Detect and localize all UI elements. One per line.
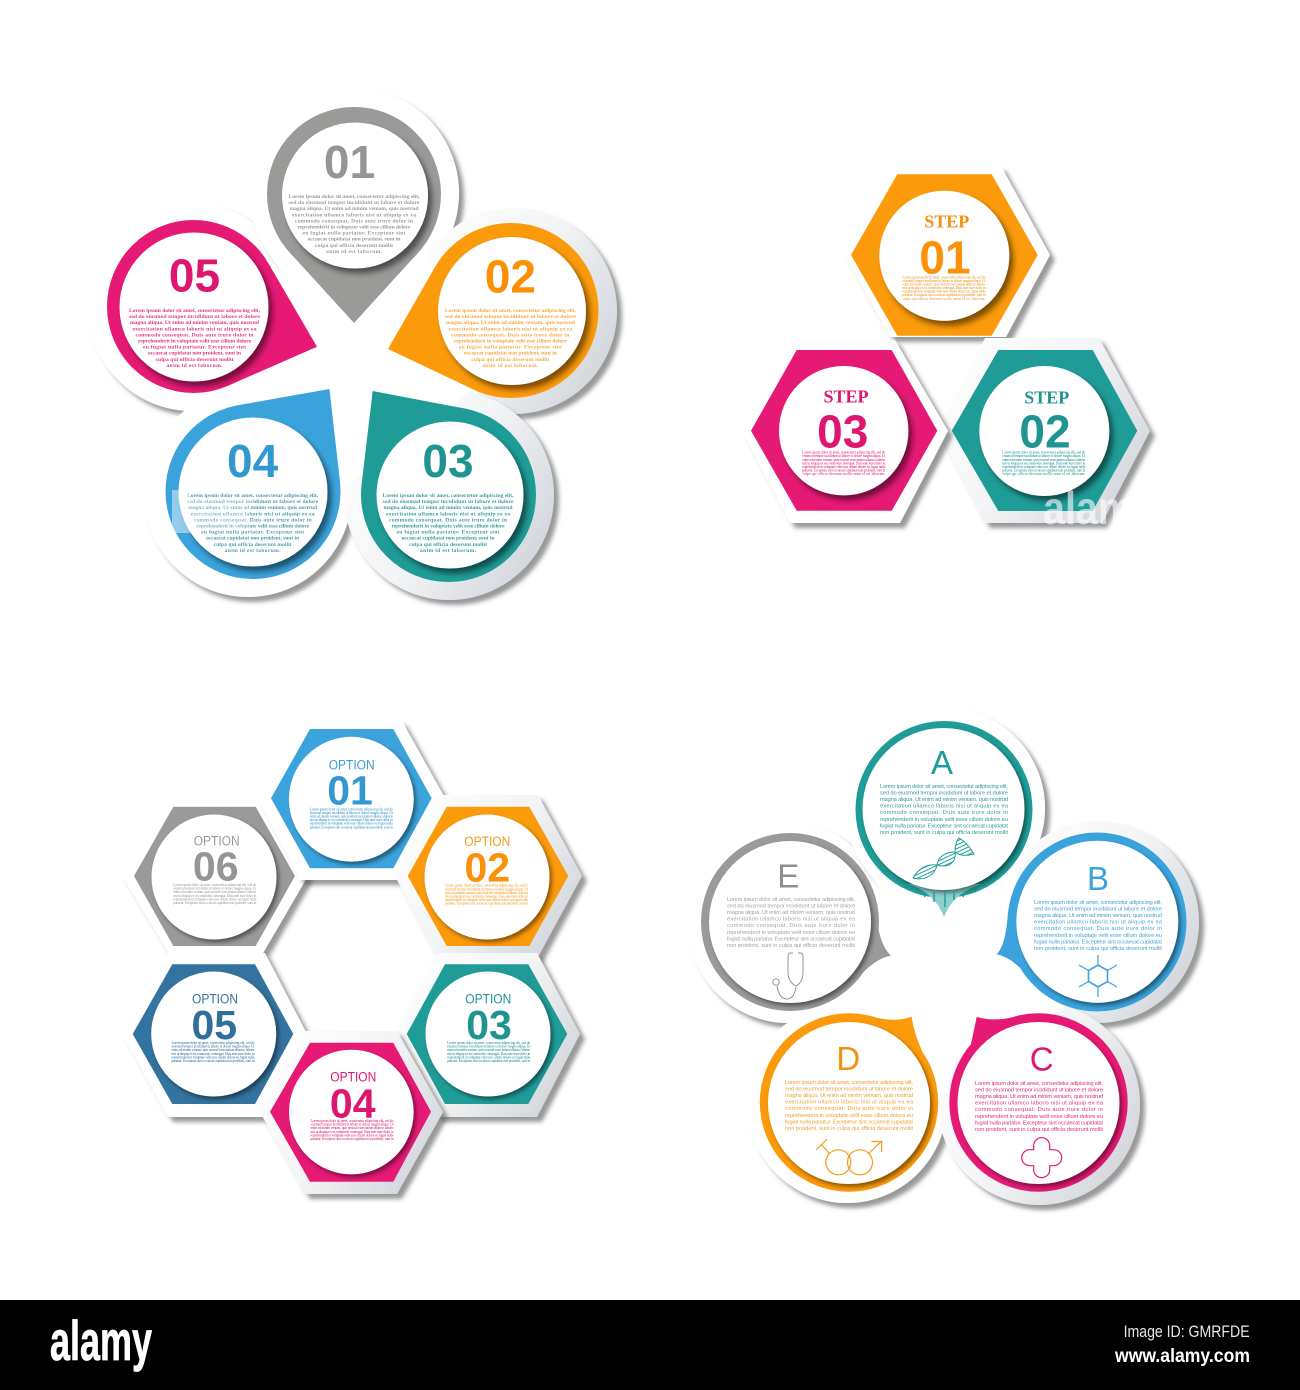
circle C pink: magna aliqua. Ut enim ad minim veniam, quis nostrud — [975, 1094, 1103, 1100]
petal 03 teal: commodo consequat. Duis aute irure dolor in — [389, 517, 508, 523]
hexagon step 03 pink: reprehenderit in voluptate velit esse cillum dolore eu fugiat nulla — [802, 465, 886, 469]
hexagon option 05 dark blue — [133, 964, 293, 1104]
petal 02 orange: 02 — [485, 251, 536, 303]
sticker 01 — [249, 88, 459, 368]
petal 05 pink: culpa qui officia deserunt mollit — [156, 357, 234, 363]
hexagon step 03 pink: pariatur. Excepteur sint occaecat cupidatat non proident, sunt in — [802, 468, 886, 473]
icon: DNA helix — [913, 838, 974, 879]
hexagon option 06 grey: OPTION — [194, 833, 240, 848]
petal 02 orange: Lorem ipsum dolor sit amet, consectetur adipiscing elit, — [445, 308, 576, 314]
petal 02 orange: exercitation ullamco laboris nisi ut aliquip ex ea — [448, 326, 573, 332]
sticker 03 — [344, 368, 554, 600]
circle E grey: Lorem ipsum dolor sit amet, consectetur adipiscing elit, — [727, 897, 855, 903]
petal 02 orange — [388, 223, 598, 398]
hexagon option 01 blue: enim ad minim veniam, quis nostrud exercitation ullamco laboris — [310, 814, 393, 820]
circle B blue: magna aliqua. Ut enim ad minim veniam, quis nostrud — [1034, 913, 1162, 919]
circle D orange: non proident, sunt in culpa qui officia deserunt mollit — [785, 1126, 913, 1132]
circle B blue: commodo consequat. Duis aute irure dolor in — [1034, 926, 1162, 932]
petal 04 blue: sed do eiusmod tempor incididunt ut labore et dolore — [187, 499, 319, 505]
circle B blue: reprehenderit in voluptate velit esse cillum dolore eu — [1034, 933, 1162, 939]
circle B blue: sed do eiusmod tempor incididunt ut labore et dolore — [1034, 907, 1162, 913]
circle A teal: non proident, sunt in culpa qui officia deserunt mollit — [880, 830, 1008, 836]
hexagon option 05 dark blue: pariatur. Excepteur sint occaecat cupidatat non proident, sunt in — [172, 1059, 255, 1064]
petal 05 pink: magna aliqua. Ut enim ad minim veniam, quis nostrud — [130, 320, 260, 326]
petal 02 orange: reprehenderit in voluptate velit esse cillum dolore — [454, 338, 567, 344]
petal 02 orange: occaecat cupidatat non proident, sunt in — [464, 351, 558, 357]
circle D orange: D — [836, 1040, 860, 1077]
hexagon option 03 teal: nisi ut aliquip ex ea commodo consequat. Duis aute irure dolor in — [447, 1052, 530, 1056]
sticker B — [945, 821, 1199, 1023]
hexagon option 01 blue: nisi ut aliquip ex ea commodo consequat. Duis aute irure dolor in — [310, 818, 393, 822]
hexagon step 02 teal: 02 — [1019, 405, 1071, 457]
petal 04 blue: magna aliqua. Ut enim ad minim veniam, quis nostrud — [188, 505, 318, 511]
hexagon step 02 teal: reprehenderit in voluptate velit esse cillum dolore eu fugiat nulla — [1002, 465, 1086, 469]
petal 03 teal: 03 — [422, 435, 474, 487]
hexagon option 03 teal — [407, 964, 567, 1104]
petal 01 grey: magna aliqua. Ut enim ad minim veniam, quis nostrud — [290, 206, 419, 212]
hexagon option 05 dark blue: nisi ut aliquip ex ea commodo consequat. Duis aute irure dolor in — [172, 1052, 255, 1056]
hexagon option 06 grey — [134, 807, 295, 946]
circle B blue: exercitation ullamco laboris nisi ut aliquip ex ea — [1034, 920, 1163, 926]
circle B blue: B — [1087, 860, 1109, 897]
sticker step 03 — [742, 340, 948, 523]
hexagon step 03 pink: 03 — [817, 405, 868, 457]
icon: medical cross — [1022, 1138, 1062, 1178]
hexagon option 06 grey: eiusmod tempor incididunt ut labore et dolore magna aliqua. Ut — [173, 887, 256, 891]
hexagon option 04 pink: enim ad minim veniam, quis nostrud exercitation ullamco laboris — [310, 1126, 394, 1131]
petal 04 blue: 04 — [227, 435, 279, 487]
circle E grey: non proident, sunt in culpa qui officia deserunt mollit — [727, 943, 855, 949]
hexagon step 02 teal — [952, 350, 1137, 511]
panel: six option hexagons — [122, 721, 582, 1194]
petal 03 teal: Lorem ipsum dolor sit amet, consectetur adipiscing elit, — [382, 493, 514, 499]
circle E grey: fugiat nulla pariatur. Excepteur sint occaecat cupidatat — [727, 936, 855, 942]
hexagon option 03 teal: Lorem ipsum dolor sit amet, consectetur adipiscing elit, sed do — [447, 1041, 530, 1046]
circle D orange: magna aliqua. Ut enim ad minim veniam, quis nostrud — [785, 1093, 913, 1099]
petal 01 grey: Lorem ipsum dolor sit amet, consectetur adipiscing elit, — [288, 194, 420, 200]
hexagon step 02 teal: Lorem ipsum dolor sit amet, consectetur adipiscing elit, sed do — [1002, 451, 1086, 456]
sticker C — [938, 975, 1140, 1205]
sticker 05 — [88, 203, 352, 411]
petal 04 blue: Lorem ipsum dolor sit amet, consectetur adipiscing elit, — [187, 493, 319, 499]
circle C pink — [949, 1013, 1128, 1192]
hexagon step 03 pink: Lorem ipsum dolor sit amet, consectetur adipiscing elit, sed do — [802, 451, 886, 456]
petal 05 pink: commodo consequat. Duis aute irure dolor in — [136, 332, 254, 338]
panel: five lettered speech circles — [688, 708, 1199, 1205]
circle A teal — [856, 721, 1032, 917]
petal 04 blue: occaecat cupidatat non proident, sunt in — [206, 536, 300, 542]
petal 01 grey — [267, 107, 441, 323]
circle E grey: E — [777, 858, 799, 895]
circle A teal: sed do eiusmod tempor incididunt ut labore et dolore — [880, 791, 1008, 797]
petal 03 teal: occaecat cupidatat non proident, sunt in — [402, 536, 495, 542]
hexagon step 01 orange — [851, 174, 1038, 336]
footer logo: alamy — [50, 1309, 152, 1372]
hexagon option 02 orange: enim ad minim veniam, quis nostrud exercitation ullamco laboris — [445, 891, 529, 896]
circle C pink: exercitation ullamco laboris nisi ut aliquip ex ea — [975, 1101, 1104, 1107]
hexagon option 05 dark blue: Lorem ipsum dolor sit amet, consectetur adipiscing elit, sed do — [172, 1041, 255, 1046]
sticker 04 — [144, 368, 352, 597]
hexagon step 03 pink: STEP — [824, 386, 868, 406]
sticker option 06 — [122, 797, 308, 955]
sticker option 04 — [260, 1031, 443, 1194]
petal 04 blue: commodo consequat. Duis aute irure dolor in — [194, 517, 312, 523]
hexagon option 05 dark blue: 05 — [191, 1002, 237, 1048]
hexagon step 02 teal: nisi ut aliquip ex ea commodo consequat. Duis aute irure dolor in — [1002, 461, 1086, 465]
hexagon step 01 orange: reprehenderit in voluptate velit esse cillum dolore eu fugiat nulla — [902, 290, 986, 294]
website: www.alamy.com — [1114, 1346, 1250, 1367]
circle B blue: non proident, sunt in culpa qui officia deserunt mollit — [1034, 946, 1162, 952]
circle D orange: Lorem ipsum dolor sit amet, consectetur adipiscing elit, — [785, 1080, 913, 1086]
circle D orange — [760, 1013, 938, 1192]
circle D orange: exercitation ullamco laboris nisi ut aliquip ex ea — [785, 1100, 914, 1106]
petal 04 blue: reprehenderit in voluptate velit esse cillum dolore — [196, 524, 310, 530]
circle E grey: reprehenderit in voluptate velit esse cillum dolore eu — [727, 930, 855, 936]
watermark fragment: alam — [1043, 482, 1133, 534]
hexagon option 02 orange: eiusmod tempor incididunt ut labore et dolore magna aliqua. Ut — [445, 887, 528, 891]
circle E grey: sed do eiusmod tempor incididunt ut labore et dolore — [727, 904, 855, 910]
hexagon option 06 grey: pariatur. Excepteur sint occaecat cupidatat non proident, sunt in — [173, 901, 257, 906]
petal 01 grey: culpa qui officia deserunt mollit — [315, 243, 393, 249]
circle A teal: fugiat nulla pariatur. Excepteur sint occaecat cupidatat — [880, 823, 1008, 829]
petal 04 blue: eu fugiat nulla pariatur. Excepteur sint — [201, 530, 304, 536]
hexagon step 03 pink — [751, 350, 937, 511]
petal 02 orange: magna aliqua. Ut enim ad minim veniam, quis nostrud — [446, 320, 576, 326]
circle A teal: exercitation ullamco laboris nisi ut aliquip ex ea — [880, 804, 1009, 810]
circle E grey: commodo consequat. Duis aute irure dolor in — [727, 923, 855, 929]
petal 01 grey: anim id est laborum. — [326, 249, 383, 255]
petal 01 grey: eu fugiat nulla pariatur. Excepteur sint — [302, 231, 406, 237]
circle B blue: fugiat nulla pariatur. Excepteur sint occaecat cupidatat — [1034, 939, 1162, 945]
hexagon option 04 pink: reprehenderit in voluptate velit esse cillum dolore eu fugiat nulla — [310, 1133, 394, 1137]
hexagon option 01 blue: pariatur. Excepteur sint occaecat cupidatat non proident, sunt in — [310, 825, 393, 830]
circle D orange: commodo consequat. Duis aute irure dolor in — [785, 1106, 913, 1112]
hexagon option 02 orange: Lorem ipsum dolor sit amet, consectetur adipiscing elit, sed do — [445, 884, 528, 889]
hexagon step 02 teal: culpa qui officia deserunt mollit anim id est laborum. — [1002, 472, 1085, 476]
sticker option 05 — [122, 953, 307, 1117]
petal 01 grey: reprehenderit in voluptate velit esse cillum dolore — [298, 224, 411, 230]
circle A teal: reprehenderit in voluptate velit esse cillum dolore eu — [880, 817, 1008, 823]
hexagon option 06 grey: nisi ut aliquip ex ea commodo consequat. Duis aute irure dolor in — [173, 894, 257, 898]
circle B blue: Lorem ipsum dolor sit amet, consectetur adipiscing elit, — [1034, 900, 1162, 906]
sticker option 01 — [258, 721, 445, 880]
petal 03 teal — [361, 391, 536, 582]
hexagon step 01 orange: culpa qui officia deserunt mollit anim id est laborum. — [902, 297, 986, 301]
sticker option 03 — [395, 953, 580, 1117]
petal 05 pink: reprehenderit in voluptate velit esse cillum dolore — [138, 338, 252, 344]
hexagon step 02 teal: pariatur. Excepteur sint occaecat cupidatat non proident, sunt in — [1002, 468, 1086, 473]
circle C pink: fugiat nulla pariatur. Excepteur sint occaecat cupidatat — [975, 1120, 1103, 1126]
hexagon option 04 pink: Lorem ipsum dolor sit amet, consectetur adipiscing elit, sed do — [310, 1119, 394, 1124]
panel: five numbered teardrops — [88, 88, 617, 600]
circle D orange: fugiat nulla pariatur. Excepteur sint occaecat cupidatat — [785, 1119, 913, 1125]
hexagon option 05 dark blue: enim ad minim veniam, quis nostrud exercitation ullamco laboris — [172, 1048, 255, 1053]
icon: stethoscope — [773, 953, 803, 999]
icon: hexagon molecule — [1079, 955, 1117, 997]
hexagon option 01 blue: 01 — [327, 767, 373, 813]
circle A teal: magna aliqua. Ut enim ad minim veniam, quis nostrud — [880, 797, 1008, 803]
hexagon option 04 pink: eiusmod tempor incididunt ut labore et dolore magna aliqua. Ut — [310, 1123, 394, 1127]
sticker E — [688, 823, 945, 1023]
hexagon option 04 pink: OPTION — [330, 1070, 376, 1085]
petal 02 orange: anim id est laborum. — [482, 363, 539, 369]
circle C pink: sed do eiusmod tempor incididunt ut labore et dolore — [975, 1088, 1103, 1094]
image id: Image ID: GMRFDE — [1124, 1322, 1250, 1341]
petal 05 pink: Lorem ipsum dolor sit amet, consectetur adipiscing elit, — [129, 308, 261, 314]
hexagon step 01 orange: nisi ut aliquip ex ea commodo consequat. Duis aute irure dolor in — [902, 286, 986, 290]
hexagon step 01 orange: STEP — [924, 212, 969, 232]
hexagon option 05 dark blue: eiusmod tempor incididunt ut labore et dolore magna aliqua. Ut — [172, 1045, 254, 1049]
circle E grey — [701, 833, 891, 1011]
hexagon option 06 grey: 06 — [193, 844, 239, 890]
petal 03 teal: eu fugiat nulla pariatur. Excepteur sint — [396, 530, 500, 536]
hexagon step 03 pink: culpa qui officia deserunt mollit anim id est laborum. — [802, 472, 885, 476]
petal 03 teal: reprehenderit in voluptate velit esse cillum dolore — [392, 524, 505, 530]
petal 05 pink: eu fugiat nulla pariatur. Excepteur sint — [143, 345, 246, 351]
sticker A — [845, 708, 1045, 975]
hexagon option 01 blue: reprehenderit in voluptate velit esse cillum dolore eu fugiat nulla — [310, 822, 393, 826]
hexagon step 03 pink: nisi ut aliquip ex ea commodo consequat. Duis aute irure dolor in — [802, 461, 886, 465]
hexagon option 01 blue: eiusmod tempor incididunt ut labore et dolore magna aliqua. Ut — [310, 811, 393, 815]
hexagon option 03 teal: pariatur. Excepteur sint occaecat cupidatat non proident, sunt in — [447, 1059, 530, 1064]
hexagon option 03 teal: 03 — [466, 1002, 512, 1048]
circle C pink: C — [1030, 1041, 1054, 1078]
hexagon step 03 pink: enim ad minim veniam, quis nostrud exercitation ullamco laboris — [802, 458, 886, 463]
circle C pink: commodo consequat. Duis aute irure dolor in — [975, 1107, 1103, 1113]
hexagon step 02 teal: enim ad minim veniam, quis nostrud exercitation ullamco laboris — [1002, 458, 1086, 463]
circle A teal: Lorem ipsum dolor sit amet, consectetur adipiscing elit, — [880, 784, 1008, 790]
circle C pink: non proident, sunt in culpa qui officia deserunt mollit — [975, 1127, 1103, 1133]
hexagon option 01 blue — [271, 729, 432, 868]
circle E grey: exercitation ullamco laboris nisi ut aliquip ex ea — [727, 917, 856, 923]
circle E grey: magna aliqua. Ut enim ad minim veniam, quis nostrud — [727, 910, 855, 916]
hexagon option 04 pink — [270, 1043, 431, 1182]
petal 02 orange: culpa qui officia deserunt mollit — [471, 357, 550, 363]
hexagon step 01 orange: enim ad minim veniam, quis nostrud exercitation ullamco laboris — [902, 283, 986, 288]
hexagon option 02 orange — [408, 807, 568, 946]
hexagon option 03 teal: OPTION — [465, 992, 511, 1007]
petal 05 pink: exercitation ullamco laboris nisi ut aliquip ex ea — [132, 326, 257, 332]
panel: three step hexagons — [742, 166, 1150, 534]
hexagon option 02 orange: nisi ut aliquip ex ea commodo consequat. Duis aute irure dolor in — [445, 894, 528, 898]
petal 01 grey: 01 — [324, 136, 375, 188]
petal 03 teal: culpa qui officia deserunt mollit — [409, 542, 487, 548]
petal 01 grey: sed do eiusmod tempor incididunt ut labore et dolore — [288, 200, 420, 206]
sticker step 01 — [845, 166, 1050, 337]
sticker option 02 — [395, 795, 582, 957]
hexagon step 03 pink: eiusmod tempor incididunt ut labore et dolore magna aliqua. Ut — [802, 454, 885, 458]
hexagon option 02 orange: OPTION — [464, 834, 510, 849]
petal 04 blue — [166, 389, 340, 579]
petal 03 teal: exercitation ullamco laboris nisi ut aliquip ex ea — [386, 511, 510, 517]
hexagon option 02 orange: reprehenderit in voluptate velit esse cillum dolore eu fugiat nulla — [445, 898, 528, 902]
sticker 02 — [352, 208, 617, 414]
hexagon option 06 grey: enim ad minim veniam, quis nostrud exercitation ullamco laboris — [173, 890, 257, 895]
hexagon option 05 dark blue: OPTION — [192, 992, 238, 1007]
hexagon step 01 orange: 01 — [919, 231, 971, 283]
hexagon step 02 teal: STEP — [1024, 387, 1069, 407]
circle D orange: reprehenderit in voluptate velit esse cillum dolore eu — [785, 1113, 913, 1119]
hexagon step 01 orange: pariatur. Excepteur sint occaecat cupidatat non proident, sunt in — [902, 293, 986, 298]
hexagon option 03 teal: reprehenderit in voluptate velit esse cillum dolore eu fugiat nulla — [447, 1055, 531, 1059]
petal 04 blue: anim id est laborum. — [225, 548, 281, 554]
hexagon option 03 teal: eiusmod tempor incididunt ut labore et dolore magna aliqua. Ut — [447, 1045, 530, 1049]
petal 05 pink: anim id est laborum. — [166, 363, 223, 369]
hexagon option 01 blue: Lorem ipsum dolor sit amet, consectetur adipiscing elit, sed do — [310, 807, 393, 812]
hexagon step 02 teal: eiusmod tempor incididunt ut labore et dolore magna aliqua. Ut — [1002, 454, 1085, 458]
sticker step 02 — [938, 338, 1150, 523]
hexagon step 01 orange: eiusmod tempor incididunt ut labore et dolore magna aliqua. Ut — [902, 279, 986, 283]
footer bar — [0, 1300, 1300, 1390]
petal 01 grey: commodo consequat. Duis aute irure dolor in — [295, 218, 414, 224]
petal 05 pink: sed do eiusmod tempor incididunt ut labore et dolore — [129, 314, 261, 320]
circle D orange: sed do eiusmod tempor incididunt ut labore et dolore — [785, 1087, 913, 1093]
petal 01 grey: exercitation ullamco laboris nisi ut aliquip ex ea — [292, 212, 416, 218]
hexagon option 05 dark blue: reprehenderit in voluptate velit esse cillum dolore eu fugiat nulla — [172, 1055, 255, 1059]
hexagon option 04 pink: nisi ut aliquip ex ea commodo consequat. Duis aute irure dolor in — [310, 1130, 394, 1134]
petal 02 orange: eu fugiat nulla pariatur. Excepteur sint — [459, 345, 562, 351]
hexagon option 06 grey: Lorem ipsum dolor sit amet, consectetur adipiscing elit, sed do — [173, 883, 257, 888]
petal 02 orange: commodo consequat. Duis aute irure dolor in — [451, 332, 570, 338]
petal 01 grey: occaecat cupidatat non proident, sunt in — [308, 237, 401, 243]
petal 02 orange: sed do eiusmod tempor incididunt ut labore et dolore — [445, 314, 576, 320]
circle A teal: commodo consequat. Duis aute irure dolor in — [880, 810, 1008, 816]
petal 05 pink: 05 — [169, 250, 220, 302]
circle C pink: reprehenderit in voluptate velit esse cillum dolore eu — [975, 1114, 1103, 1120]
petal 03 teal: sed do eiusmod tempor incididunt ut labore et dolore — [382, 499, 514, 505]
petal 05 pink: occaecat cupidatat non proident, sunt in — [148, 351, 242, 357]
petal 03 teal: anim id est laborum. — [420, 548, 477, 554]
petal 04 blue: culpa qui officia deserunt mollit — [214, 542, 292, 548]
circle A teal: A — [931, 744, 953, 781]
hexagon option 06 grey: reprehenderit in voluptate velit esse cillum dolore eu fugiat nulla — [173, 897, 257, 901]
hexagon option 02 orange: 02 — [464, 845, 510, 891]
hexagon option 03 teal: enim ad minim veniam, quis nostrud exercitation ullamco laboris — [447, 1048, 531, 1053]
circle B blue — [997, 832, 1186, 1012]
hexagon option 04 pink: pariatur. Excepteur sint occaecat cupidatat non proident, sunt in — [310, 1137, 394, 1142]
hexagon option 02 orange: pariatur. Excepteur sint occaecat cupidatat non proident, sunt in — [445, 902, 528, 907]
sticker D — [747, 975, 947, 1203]
hexagon option 01 blue: OPTION — [329, 757, 375, 772]
petal 05 pink — [107, 220, 317, 393]
circle C pink: Lorem ipsum dolor sit amet, consectetur adipiscing elit, — [975, 1081, 1103, 1087]
hexagon step 01 orange: Lorem ipsum dolor sit amet, consectetur adipiscing elit, sed do — [902, 276, 986, 280]
petal 03 teal: magna aliqua. Ut enim ad minim veniam, quis nostrud — [384, 505, 513, 511]
hexagon option 04 pink: 04 — [330, 1080, 376, 1126]
icon: gender symbols — [816, 1139, 882, 1175]
petal 04 blue: exercitation ullamco laboris nisi ut aliquip ex ea — [191, 511, 315, 517]
